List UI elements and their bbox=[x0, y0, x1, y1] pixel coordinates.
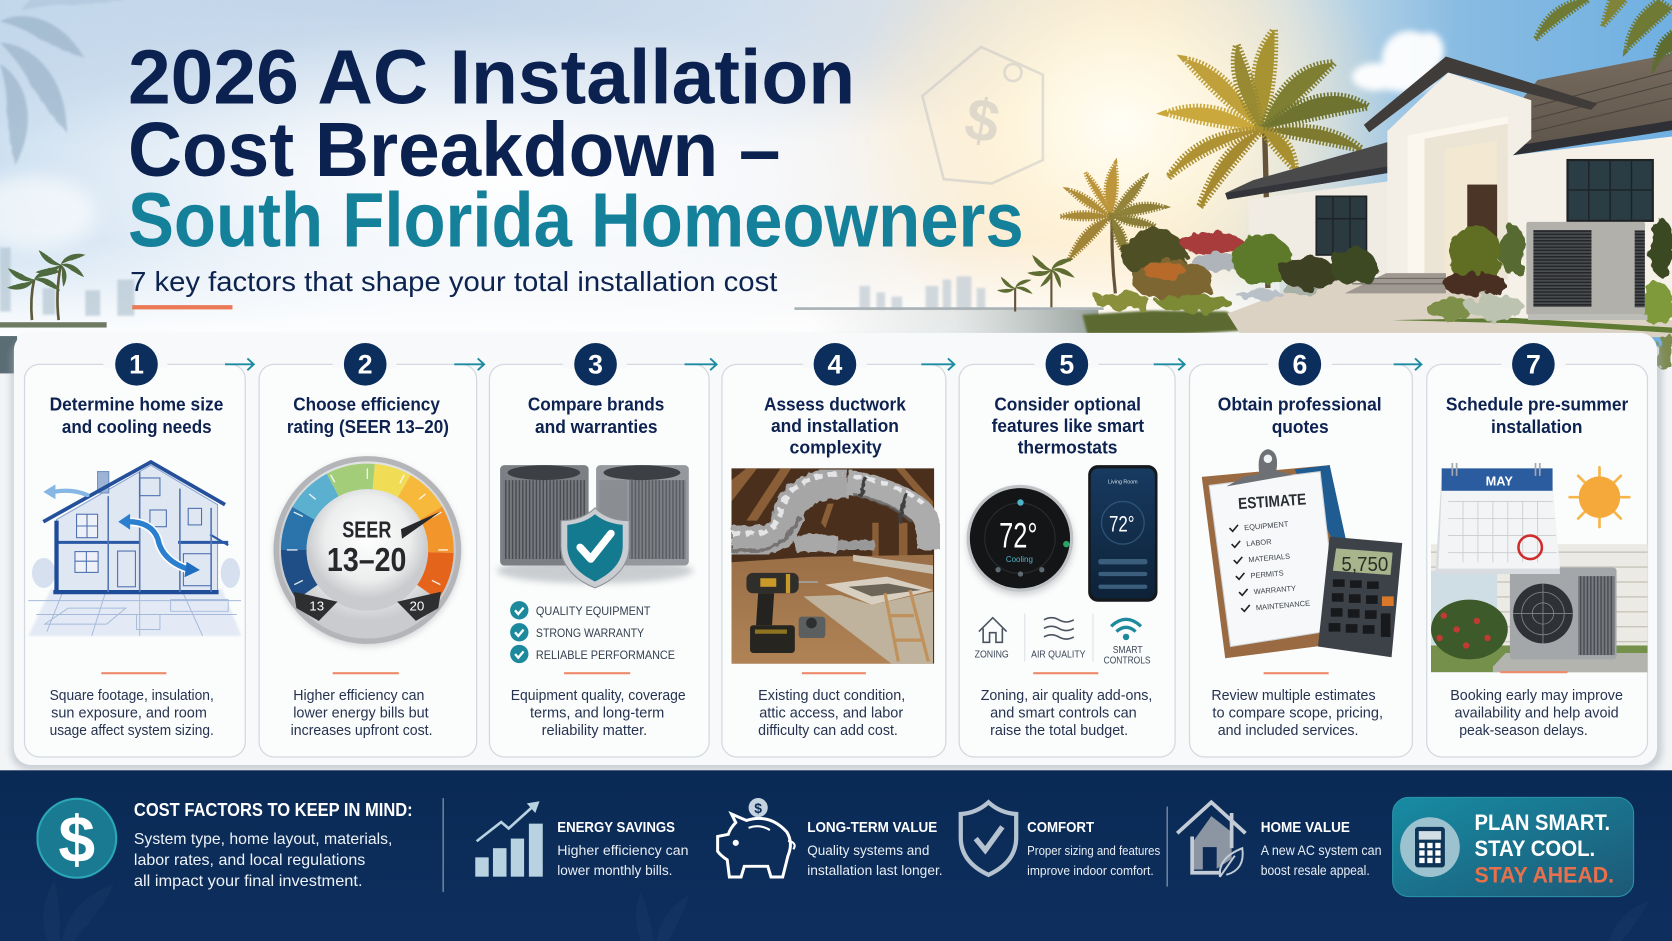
card 4: ductwork bbox=[722, 343, 946, 757]
description: terms, and long-term bbox=[530, 705, 664, 721]
heading: installation bbox=[1491, 417, 1582, 437]
heading bbox=[528, 395, 664, 437]
subtitle: 7 key factors that shape your total installation cost bbox=[130, 266, 778, 297]
left wing bbox=[1249, 181, 1388, 280]
heading bbox=[50, 395, 223, 437]
central gable bbox=[1387, 73, 1531, 280]
divider bbox=[1264, 672, 1329, 674]
icon: dollar badge bbox=[37, 799, 116, 878]
heading bbox=[764, 395, 907, 457]
SEER gauge: 20 bbox=[410, 598, 424, 613]
feature icons: ZONING bbox=[975, 650, 1009, 661]
icon: piggy bank bbox=[718, 798, 795, 877]
description bbox=[1211, 688, 1383, 739]
description bbox=[50, 688, 214, 739]
heading bbox=[1446, 395, 1628, 437]
SEER gauge: 13 bbox=[309, 598, 324, 613]
description: sun exposure, and room bbox=[51, 705, 207, 721]
comfort text: COMFORT bbox=[1027, 820, 1094, 836]
top right palm fronds bbox=[1536, 0, 1672, 66]
checklist: QUALITY EQUIPMENT bbox=[536, 605, 650, 618]
description: Equipment quality, coverage bbox=[511, 688, 686, 704]
phone app: 72° bbox=[1109, 511, 1135, 536]
description: Higher efficiency can bbox=[293, 688, 424, 704]
description: peak-season delays. bbox=[1459, 723, 1588, 739]
step number 5 bbox=[1046, 343, 1088, 386]
subtitle accent line bbox=[132, 305, 232, 309]
calendar bbox=[1435, 463, 1560, 574]
cost factors text: labor rates, and local regulations bbox=[134, 852, 365, 869]
heading: thermostats bbox=[1018, 437, 1118, 457]
description: Zoning, air quality add-ons, bbox=[981, 688, 1152, 704]
divider bbox=[802, 672, 866, 674]
arrow 6 to 7 bbox=[1394, 358, 1421, 370]
second palm crown bbox=[1060, 163, 1164, 260]
heading: Determine home size bbox=[50, 395, 223, 415]
SEER gauge bbox=[274, 456, 461, 647]
step number 3: 3 bbox=[588, 349, 603, 379]
clipboard estimate: PERMITS bbox=[1250, 568, 1284, 580]
feature icons bbox=[975, 613, 1151, 667]
heading: and cooling needs bbox=[62, 417, 212, 437]
heading bbox=[287, 395, 449, 437]
comfort text: improve indoor comfort. bbox=[1027, 863, 1154, 878]
description: to compare scope, pricing, bbox=[1212, 705, 1383, 721]
cost factors text bbox=[134, 800, 413, 890]
description: reliability matter. bbox=[542, 723, 647, 739]
divider: comfort and home value bbox=[1167, 807, 1168, 887]
step number 3 bbox=[574, 343, 617, 386]
heading bbox=[992, 395, 1144, 457]
calculator bbox=[1318, 537, 1402, 657]
comfort text: Proper sizing and features bbox=[1027, 843, 1160, 858]
step number 1 bbox=[115, 343, 158, 386]
home value text bbox=[1261, 820, 1382, 878]
garden plants and shrubs bbox=[1094, 219, 1672, 367]
icon: home value bbox=[1177, 802, 1245, 877]
long-term value text: installation last longer. bbox=[807, 862, 943, 878]
SEER gauge: 13–20 bbox=[327, 542, 406, 579]
divider bbox=[101, 672, 166, 674]
step number 6: 6 bbox=[1292, 349, 1307, 379]
heading: Obtain professional bbox=[1218, 395, 1382, 415]
heading: features like smart bbox=[992, 416, 1144, 436]
outdoor AC unit in header bbox=[1526, 222, 1647, 320]
smart thermostat: 72° bbox=[999, 516, 1038, 555]
card 5: optional features bbox=[959, 343, 1175, 757]
clipboard estimate: EQUIPMENT bbox=[1244, 519, 1289, 532]
card 6: professional quotes bbox=[1189, 343, 1412, 757]
energy savings text: Higher efficiency can bbox=[557, 842, 689, 858]
icon: energy savings chart bbox=[475, 801, 543, 877]
title: South Florida Homeowners bbox=[128, 177, 1024, 263]
description: raise the total budget. bbox=[990, 723, 1128, 739]
house and AC scene bbox=[1431, 544, 1647, 672]
cost factors text: System type, home layout, materials, bbox=[134, 831, 392, 848]
step number 4 bbox=[814, 343, 856, 386]
callout text: PLAN SMART. bbox=[1475, 810, 1610, 835]
callout: plan smart bbox=[1393, 797, 1634, 897]
step number 1: 1 bbox=[129, 349, 144, 379]
card 2: efficiency rating bbox=[259, 343, 477, 757]
cost factors text: all impact your final investment. bbox=[134, 873, 363, 890]
arrow 1 to 2 bbox=[225, 358, 254, 370]
icon: ghost price tag: $ bbox=[960, 85, 1005, 156]
description: attic access, and labor bbox=[759, 705, 903, 721]
home value text: boost resale appeal. bbox=[1261, 862, 1370, 878]
calculator: 5,750 bbox=[1341, 554, 1388, 576]
description: Square footage, insulation, bbox=[50, 688, 214, 704]
clipboard estimate: ESTIMATE bbox=[1238, 491, 1307, 513]
right wing wall bbox=[1497, 137, 1672, 320]
icon: piggy bank: $ bbox=[754, 800, 762, 816]
heading: Schedule pre-summer bbox=[1446, 395, 1628, 415]
callout text: STAY AHEAD. bbox=[1475, 862, 1614, 887]
heading: and installation bbox=[771, 416, 899, 436]
arrow 2 to 3 bbox=[454, 358, 484, 370]
calendar: MAY bbox=[1486, 473, 1513, 488]
description: availability and help avoid bbox=[1454, 705, 1619, 721]
step number 7: 7 bbox=[1526, 349, 1541, 379]
description: and smart controls can bbox=[990, 705, 1137, 721]
description: lower energy bills but bbox=[293, 705, 429, 721]
description: Existing duct condition, bbox=[758, 688, 905, 704]
divider bbox=[1033, 672, 1098, 674]
icon: dollar badge: $ bbox=[58, 803, 95, 877]
smart thermostat bbox=[967, 485, 1074, 595]
icon: calculator badge bbox=[1400, 817, 1460, 877]
clipboard estimate: MAINTENANCE bbox=[1256, 599, 1310, 612]
steps and path bbox=[1345, 273, 1446, 293]
icon: ghost price tag bbox=[922, 47, 1043, 184]
heading: Choose efficiency bbox=[293, 395, 440, 415]
sun icon bbox=[1570, 467, 1629, 527]
arrow 3 to 4 bbox=[685, 358, 717, 370]
home value text: HOME VALUE bbox=[1261, 820, 1350, 836]
step number 5: 5 bbox=[1059, 349, 1074, 379]
card 7: pre-summer installation bbox=[1427, 343, 1647, 757]
energy savings text bbox=[557, 820, 689, 878]
panel: white steps container bbox=[11, 333, 1662, 770]
feature icons: SMART bbox=[1113, 645, 1143, 656]
description: difficulty can add cost. bbox=[758, 723, 898, 739]
long-term value text: Quality systems and bbox=[807, 842, 929, 858]
divider bbox=[564, 672, 630, 674]
airflow arrows bbox=[43, 484, 200, 577]
bottom navy bar bbox=[0, 770, 1672, 941]
cost factors text: COST FACTORS TO KEEP IN MIND: bbox=[134, 800, 413, 820]
callout text bbox=[1475, 810, 1614, 887]
clipboard estimate: MATERIALS bbox=[1248, 552, 1290, 564]
heading: rating (SEER 13–20) bbox=[287, 417, 449, 437]
title: 2026 AC Installation bbox=[128, 34, 855, 120]
arrow 5 to 6 bbox=[1154, 358, 1185, 370]
energy savings text: lower monthly bills. bbox=[557, 862, 672, 878]
title: Cost Breakdown – bbox=[128, 107, 781, 193]
description bbox=[758, 688, 905, 739]
description: increases upfront cost. bbox=[291, 723, 433, 739]
feature icons: CONTROLS bbox=[1104, 656, 1151, 667]
heading: Compare brands bbox=[528, 395, 664, 415]
house bbox=[1225, 53, 1672, 337]
checklist: RELIABLE PERFORMANCE bbox=[536, 649, 675, 662]
phone app bbox=[1088, 465, 1157, 602]
description: usage affect system sizing. bbox=[50, 723, 214, 739]
clipboard estimate: WARRANTY bbox=[1253, 584, 1296, 596]
left shoreline with palms and city bbox=[0, 248, 134, 373]
heading bbox=[1218, 395, 1382, 437]
description bbox=[291, 688, 433, 739]
divider bbox=[1500, 671, 1568, 673]
card 3: brands and warranties bbox=[489, 343, 709, 757]
title bbox=[128, 34, 1024, 263]
arrow 4 to 5 bbox=[921, 358, 954, 370]
feature icons: AIR QUALITY bbox=[1031, 650, 1086, 661]
description: Review multiple estimates bbox=[1211, 688, 1376, 704]
checklist: STRONG WARRANTY bbox=[536, 627, 644, 640]
heading: and warranties bbox=[535, 417, 658, 437]
blueprint house illustration bbox=[28, 462, 242, 636]
phone app: Living Room bbox=[1108, 479, 1138, 485]
clipboard estimate: LABOR bbox=[1246, 537, 1272, 548]
description bbox=[511, 688, 686, 739]
description bbox=[981, 688, 1152, 739]
description bbox=[1450, 688, 1623, 739]
right roof bbox=[1480, 53, 1672, 157]
step number 6 bbox=[1279, 343, 1321, 386]
silver ducts bbox=[732, 474, 930, 551]
checklist bbox=[510, 601, 675, 663]
AC units with shield bbox=[497, 465, 693, 588]
drill bbox=[746, 573, 825, 653]
heading: Assess ductwork bbox=[764, 395, 907, 415]
attic photo bbox=[732, 468, 934, 664]
step number 2: 2 bbox=[358, 349, 373, 379]
comfort text bbox=[1027, 820, 1160, 878]
big palm crown bbox=[1168, 30, 1368, 207]
heading: Consider optional bbox=[994, 395, 1141, 415]
long-term value text: LONG-TERM VALUE bbox=[807, 820, 938, 836]
divider bbox=[333, 672, 399, 674]
long-term value text bbox=[807, 820, 943, 878]
distant skyline and water bbox=[794, 276, 1258, 336]
description: Booking early may improve bbox=[1450, 688, 1623, 704]
home value text: A new AC system can bbox=[1261, 842, 1382, 858]
step number 7 bbox=[1512, 343, 1555, 386]
SEER gauge: SEER bbox=[342, 516, 391, 542]
heading: complexity bbox=[790, 437, 882, 457]
energy savings text: ENERGY SAVINGS bbox=[557, 820, 675, 836]
callout text: STAY COOL. bbox=[1475, 836, 1595, 861]
heading: quotes bbox=[1272, 417, 1329, 437]
ground under the house bbox=[1227, 280, 1672, 337]
icon: comfort shield bbox=[961, 802, 1016, 875]
divider: cost factors bbox=[443, 798, 444, 892]
palm trees bbox=[997, 30, 1368, 312]
description: and included services. bbox=[1218, 723, 1358, 739]
step number 4: 4 bbox=[828, 349, 843, 379]
card 1: determine home size bbox=[25, 343, 245, 757]
step number 2 bbox=[344, 343, 387, 386]
smart thermostat: Cooling bbox=[1006, 555, 1033, 564]
faint palm leaves top left bbox=[0, 0, 133, 166]
clipboard estimate bbox=[1202, 449, 1365, 658]
